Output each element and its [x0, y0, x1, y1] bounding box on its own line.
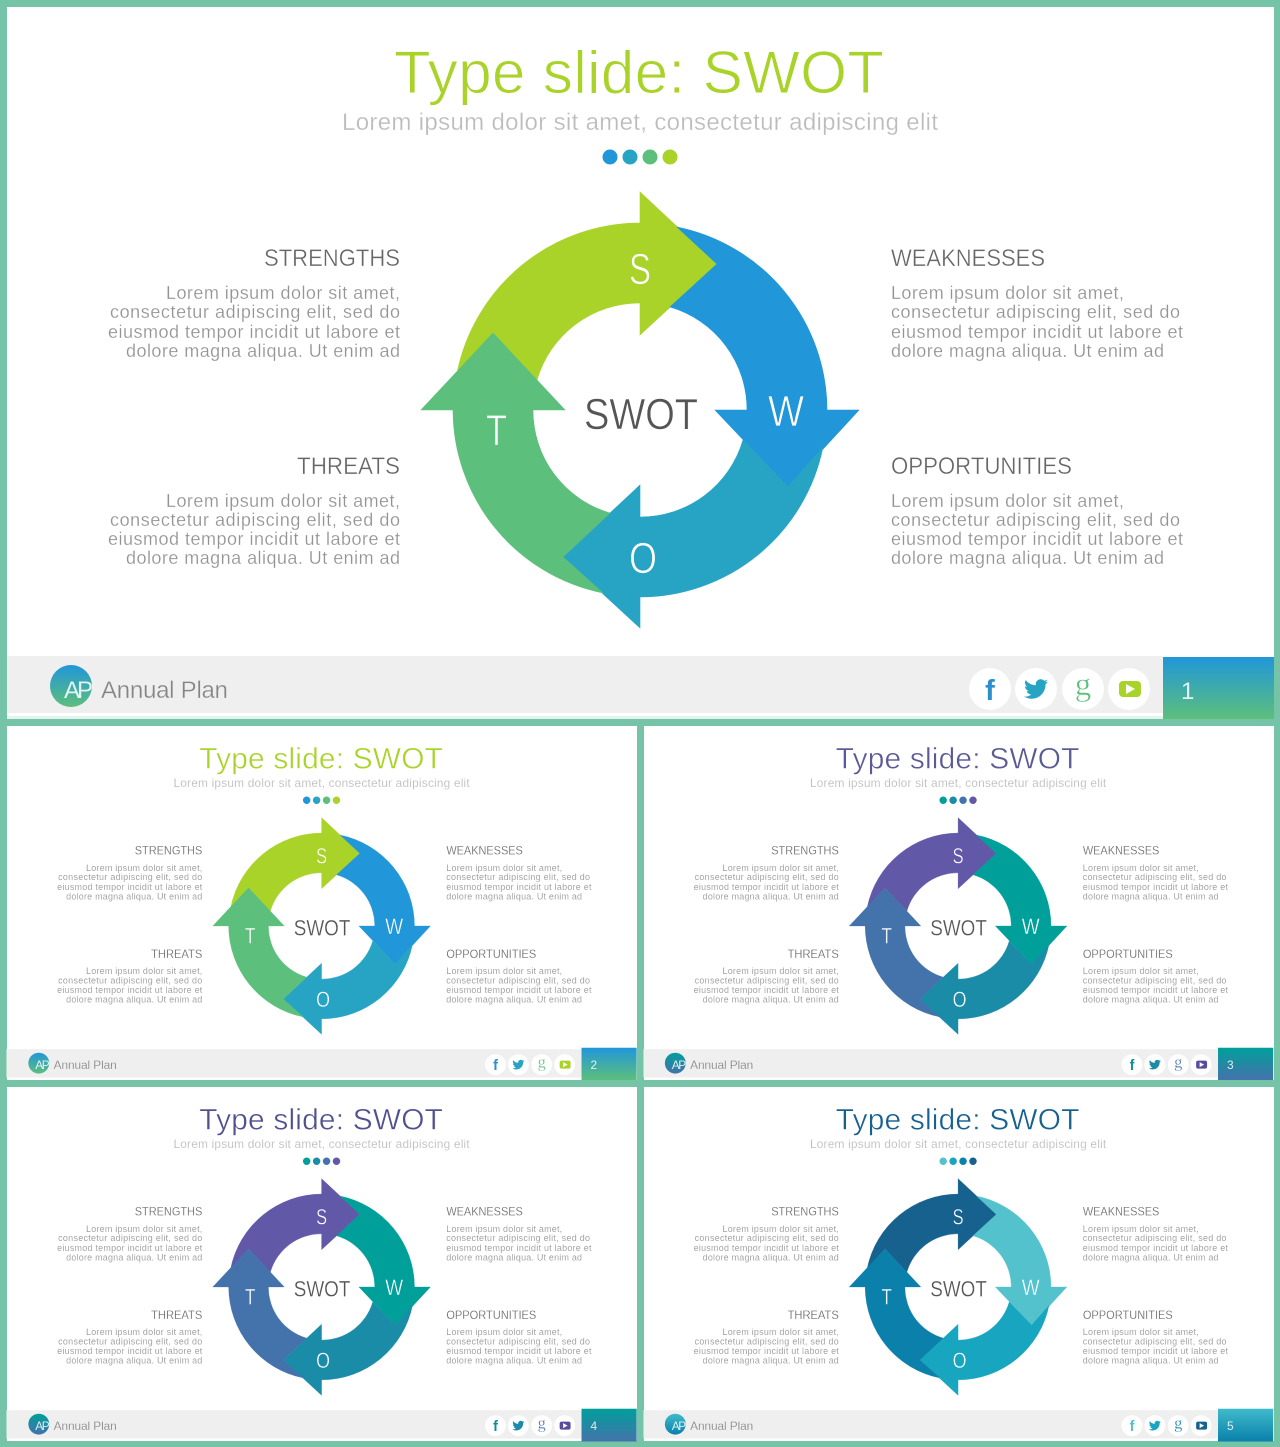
- subtitle: Lorem ipsum dolor sit amet, consectetur adipiscing elit: [342, 109, 938, 136]
- text block: threats: eiusmod tempor incidit ut labore et: [57, 1346, 203, 1356]
- text block: strengths: consectetur adipiscing elit, sed do: [58, 872, 202, 882]
- text block: opportunities: eiusmod tempor incidit ut labore et: [446, 985, 592, 995]
- slide 3: purple and teal thumbnail: [643, 726, 1274, 1080]
- footer bar: [643, 1409, 1273, 1442]
- arrow: O: [920, 1302, 1049, 1395]
- text block: weaknesses: [891, 245, 1183, 361]
- brand name: Annual Plan: [690, 1419, 753, 1433]
- centre label: SWOT: [584, 390, 698, 439]
- text block: threats: consectetur adipiscing elit, sed do: [695, 1337, 839, 1347]
- text block: threats: [57, 947, 203, 1005]
- arrow: O: O: [316, 1348, 330, 1373]
- arrow: T: T: [486, 406, 507, 455]
- footer bar: [6, 1048, 637, 1080]
- text block: weaknesses: eiusmod tempor incidit ut labore et: [1083, 882, 1228, 892]
- text block: threats: THREATS: [788, 947, 839, 961]
- icon: twitter: [508, 1054, 529, 1075]
- colour dots: [602, 150, 678, 164]
- text block: opportunities: consectetur adipiscing elit, sed do: [446, 1337, 590, 1347]
- footer bar: [6, 1409, 637, 1442]
- icon: facebook: f: [1130, 1058, 1135, 1074]
- text block: opportunities: Lorem ipsum dolor sit amet,: [446, 966, 562, 976]
- icon: facebook: [485, 1054, 506, 1075]
- icon: youtube: [1191, 1054, 1212, 1075]
- text block: weaknesses: eiusmod tempor incidit ut labore et: [1083, 1243, 1228, 1253]
- arrow: T: T: [882, 923, 892, 948]
- text block: weaknesses: [1083, 1204, 1228, 1263]
- text block: strengths: Lorem ipsum dolor sit amet,: [166, 283, 400, 303]
- SWOT cycle diagram: [213, 818, 430, 1034]
- arrow: S: [457, 192, 717, 380]
- text block: threats: eiusmod tempor incidit ut labore et: [108, 529, 400, 549]
- logo: AP: [64, 677, 93, 704]
- arrow: W: W: [768, 387, 804, 436]
- text block: threats: consectetur adipiscing elit, sed do: [110, 510, 400, 530]
- arrow: S: S: [629, 245, 651, 294]
- text block: weaknesses: [446, 843, 592, 902]
- arrow: W: W: [385, 914, 403, 939]
- text block: opportunities: OPPORTUNITIES: [1083, 1308, 1173, 1322]
- text block: weaknesses: dolore magna aliqua. Ut enim ad: [1083, 892, 1219, 902]
- text block: weaknesses: consectetur adipiscing elit, sed do: [446, 872, 590, 882]
- arrow: W: [973, 1196, 1067, 1325]
- SWOT cycle diagram: [849, 1179, 1067, 1395]
- arrow: T: [849, 888, 943, 1017]
- text block: strengths: consectetur adipiscing elit, sed do: [695, 1233, 839, 1243]
- text block: weaknesses: Lorem ipsum dolor sit amet,: [1083, 863, 1199, 873]
- arrow: O: [563, 440, 823, 628]
- page number box: [582, 1048, 637, 1080]
- text block: threats: dolore magna aliqua. Ut enim ad: [126, 548, 400, 568]
- subtitle: Lorem ipsum dolor sit amet, consectetur adipiscing elit: [173, 1137, 470, 1151]
- text block: weaknesses: WEAKNESSES: [446, 843, 523, 857]
- icon: google: [531, 1053, 552, 1075]
- text block: opportunities: dolore magna aliqua. Ut enim ad: [1083, 1356, 1219, 1366]
- text block: strengths: consectetur adipiscing elit, sed do: [58, 1233, 202, 1243]
- page number box: 4: [590, 1419, 597, 1433]
- text block: opportunities: [446, 1308, 592, 1366]
- text block: opportunities: eiusmod tempor incidit ut labore et: [1083, 985, 1228, 995]
- arrow: W: W: [1022, 914, 1040, 939]
- text block: strengths: eiusmod tempor incidit ut labore et: [694, 882, 839, 892]
- logo: [28, 1053, 50, 1074]
- subtitle: Lorem ipsum dolor sit amet, consectetur adipiscing elit: [173, 776, 470, 790]
- logo: [665, 1414, 686, 1435]
- text block: weaknesses: eiusmod tempor incidit ut labore et: [891, 322, 1183, 342]
- text block: weaknesses: Lorem ipsum dolor sit amet,: [1083, 1224, 1199, 1234]
- icon: youtube: [1191, 1415, 1212, 1436]
- text block: weaknesses: consectetur adipiscing elit, sed do: [1083, 1233, 1226, 1243]
- text block: threats: Lorem ipsum dolor sit amet,: [86, 1327, 202, 1337]
- slide 4: purple and teal thumbnail: [6, 1087, 637, 1442]
- text block: strengths: Lorem ipsum dolor sit amet,: [723, 1224, 839, 1234]
- slide 2: green and blue thumbnail: [6, 726, 637, 1080]
- arrow: S: [231, 818, 360, 911]
- slide 5: deep blue and aqua thumbnail: [643, 1087, 1274, 1442]
- arrow: O: O: [316, 987, 330, 1012]
- text block: strengths: Lorem ipsum dolor sit amet,: [86, 1224, 202, 1234]
- icon: google: g: [538, 1053, 546, 1072]
- icon: facebook: f: [1130, 1419, 1135, 1435]
- text block: opportunities: OPPORTUNITIES: [446, 1308, 536, 1322]
- text block: opportunities: OPPORTUNITIES: [891, 453, 1072, 480]
- page number box: [582, 1409, 637, 1442]
- icon: google: g: [538, 1414, 546, 1433]
- text block: opportunities: [1083, 947, 1228, 1005]
- icon: google: g: [1174, 1414, 1182, 1433]
- text block: weaknesses: Lorem ipsum dolor sit amet,: [446, 863, 562, 873]
- logo: [665, 1053, 686, 1074]
- text block: weaknesses: consectetur adipiscing elit, sed do: [891, 302, 1180, 322]
- text block: opportunities: [1083, 1308, 1228, 1366]
- text block: strengths: dolore magna aliqua. Ut enim ad: [703, 1253, 839, 1263]
- text block: weaknesses: WEAKNESSES: [1083, 1204, 1159, 1218]
- text block: threats: Lorem ipsum dolor sit amet,: [86, 966, 202, 976]
- text block: opportunities: dolore magna aliqua. Ut enim ad: [446, 995, 582, 1005]
- text block: weaknesses: Lorem ipsum dolor sit amet,: [446, 1224, 562, 1234]
- text block: strengths: dolore magna aliqua. Ut enim ad: [66, 892, 202, 902]
- icon: facebook: [1122, 1415, 1142, 1436]
- centre label: SWOT: [930, 1276, 987, 1301]
- title: Type slide: SWOT: [836, 1103, 1079, 1136]
- arrow: T: [421, 333, 610, 593]
- logo: [50, 665, 93, 707]
- text block: opportunities: dolore magna aliqua. Ut enim ad: [891, 548, 1164, 568]
- icon: twitter: [1144, 1054, 1165, 1075]
- subtitle: Lorem ipsum dolor sit amet, consectetur adipiscing elit: [810, 776, 1107, 790]
- icon: google: [1168, 1053, 1189, 1075]
- text block: threats: Lorem ipsum dolor sit amet,: [723, 1327, 839, 1337]
- arrow: S: S: [316, 843, 327, 868]
- text block: weaknesses: dolore magna aliqua. Ut enim ad: [891, 341, 1164, 361]
- arrow: T: [213, 888, 307, 1017]
- icon: google: [1168, 1414, 1189, 1436]
- page number box: 1: [1181, 678, 1194, 705]
- icon: youtube: [1108, 668, 1150, 710]
- text block: opportunities: eiusmod tempor incidit ut labore et: [891, 529, 1183, 549]
- text block: threats: Lorem ipsum dolor sit amet,: [166, 491, 400, 511]
- text block: weaknesses: eiusmod tempor incidit ut labore et: [446, 882, 592, 892]
- SWOT cycle diagram: [421, 192, 859, 628]
- text block: threats: THREATS: [297, 453, 400, 480]
- text block: strengths: eiusmod tempor incidit ut labore et: [108, 322, 400, 342]
- text block: threats: dolore magna aliqua. Ut enim ad: [66, 1356, 202, 1366]
- brand name: Annual Plan: [54, 1058, 117, 1072]
- colour dots: [939, 797, 977, 804]
- text block: weaknesses: consectetur adipiscing elit, sed do: [1083, 872, 1226, 882]
- text block: threats: [57, 1308, 203, 1366]
- page number box: 2: [590, 1058, 597, 1072]
- text block: opportunities: consectetur adipiscing elit, sed do: [1083, 1337, 1226, 1347]
- text block: weaknesses: WEAKNESSES: [1083, 843, 1159, 857]
- arrow: S: [231, 1179, 360, 1272]
- text block: strengths: [57, 1204, 203, 1263]
- SWOT cycle diagram: [213, 1179, 430, 1395]
- icon: youtube: [554, 1415, 575, 1436]
- text block: strengths: consectetur adipiscing elit, sed do: [110, 302, 400, 322]
- logo: AP: [35, 1058, 50, 1072]
- logo: AP: [35, 1419, 50, 1433]
- brand name: Annual Plan: [690, 1058, 753, 1072]
- text block: opportunities: Lorem ipsum dolor sit amet,: [1083, 966, 1199, 976]
- arrow: W: W: [385, 1275, 403, 1300]
- text block: threats: Lorem ipsum dolor sit amet,: [723, 966, 839, 976]
- text block: weaknesses: dolore magna aliqua. Ut enim ad: [446, 1253, 582, 1263]
- footer bar: [7, 656, 1274, 719]
- text block: opportunities: OPPORTUNITIES: [1083, 947, 1173, 961]
- logo: AP: [672, 1058, 686, 1072]
- icon: twitter: [508, 1415, 529, 1436]
- page number box: [1218, 1048, 1273, 1080]
- text block: threats: consectetur adipiscing elit, sed do: [58, 1337, 202, 1347]
- arrow: T: T: [245, 923, 255, 948]
- text block: threats: [694, 1308, 839, 1366]
- arrow: S: S: [953, 843, 964, 868]
- text block: strengths: eiusmod tempor incidit ut labore et: [57, 1243, 203, 1253]
- arrow: T: [849, 1249, 943, 1378]
- arrow: W: [336, 835, 430, 964]
- icon: google: [531, 1414, 552, 1436]
- text block: strengths: eiusmod tempor incidit ut labore et: [57, 882, 203, 892]
- text block: threats: eiusmod tempor incidit ut labore et: [694, 985, 839, 995]
- text block: weaknesses: dolore magna aliqua. Ut enim ad: [1083, 1253, 1219, 1263]
- brand name: Annual Plan: [54, 1419, 117, 1433]
- icon: facebook: [485, 1415, 506, 1436]
- centre label: SWOT: [294, 1276, 350, 1301]
- page number box: 5: [1227, 1419, 1234, 1433]
- text block: threats: eiusmod tempor incidit ut labore et: [694, 1346, 839, 1356]
- logo: [28, 1414, 50, 1435]
- text block: opportunities: dolore magna aliqua. Ut enim ad: [446, 1356, 582, 1366]
- icon: facebook: f: [493, 1419, 498, 1435]
- text block: weaknesses: [1083, 843, 1228, 902]
- subtitle: Lorem ipsum dolor sit amet, consectetur adipiscing elit: [810, 1137, 1107, 1151]
- text block: weaknesses: dolore magna aliqua. Ut enim ad: [446, 892, 582, 902]
- text block: opportunities: Lorem ipsum dolor sit amet,: [446, 1327, 562, 1337]
- icon: twitter: [1015, 668, 1057, 710]
- arrow: O: O: [629, 534, 657, 583]
- colour dots: [939, 1158, 977, 1165]
- text block: weaknesses: [446, 1204, 592, 1263]
- icon: google: g: [1075, 667, 1091, 703]
- colour dots: [303, 797, 340, 804]
- text block: strengths: STRENGTHS: [135, 843, 202, 857]
- text block: strengths: dolore magna aliqua. Ut enim ad: [703, 892, 839, 902]
- text block: strengths: STRENGTHS: [771, 1204, 839, 1218]
- text block: opportunities: eiusmod tempor incidit ut labore et: [446, 1346, 592, 1356]
- text block: opportunities: OPPORTUNITIES: [446, 947, 536, 961]
- page number box: 3: [1227, 1058, 1234, 1072]
- text block: weaknesses: WEAKNESSES: [891, 245, 1045, 272]
- text block: strengths: [694, 1204, 839, 1263]
- text block: weaknesses: consectetur adipiscing elit, sed do: [446, 1233, 590, 1243]
- title: Type slide: SWOT: [199, 1103, 443, 1136]
- text block: threats: consectetur adipiscing elit, sed do: [58, 976, 202, 986]
- text block: strengths: Lorem ipsum dolor sit amet,: [86, 863, 202, 873]
- text block: threats: eiusmod tempor incidit ut labore et: [57, 985, 203, 995]
- text block: weaknesses: eiusmod tempor incidit ut labore et: [446, 1243, 592, 1253]
- text block: strengths: STRENGTHS: [771, 843, 839, 857]
- logo: AP: [672, 1419, 686, 1433]
- text block: strengths: [108, 245, 400, 361]
- page number box: [1218, 1409, 1273, 1442]
- text block: threats: [108, 453, 400, 568]
- icon: facebook: f: [985, 675, 995, 707]
- text block: threats: dolore magna aliqua. Ut enim ad: [703, 1356, 839, 1366]
- text block: opportunities: Lorem ipsum dolor sit amet,: [1083, 1327, 1199, 1337]
- icon: facebook: f: [493, 1058, 498, 1074]
- arrow: O: [283, 941, 413, 1034]
- arrow: W: [670, 227, 859, 487]
- arrow: W: W: [1022, 1275, 1040, 1300]
- arrow: W: [336, 1196, 430, 1325]
- arrow: T: [213, 1249, 307, 1378]
- text block: opportunities: consectetur adipiscing elit, sed do: [1083, 976, 1226, 986]
- text block: opportunities: eiusmod tempor incidit ut labore et: [1083, 1346, 1228, 1356]
- text block: strengths: Lorem ipsum dolor sit amet,: [723, 863, 839, 873]
- text block: threats: dolore magna aliqua. Ut enim ad: [66, 995, 202, 1005]
- text block: strengths: dolore magna aliqua. Ut enim ad: [66, 1253, 202, 1263]
- text block: opportunities: dolore magna aliqua. Ut enim ad: [1083, 995, 1219, 1005]
- slide 1: large green and blue SWOT: [7, 7, 1274, 719]
- text block: strengths: consectetur adipiscing elit, sed do: [695, 872, 839, 882]
- arrow: T: T: [245, 1284, 255, 1309]
- text block: opportunities: [446, 947, 592, 1005]
- arrow: O: [283, 1302, 413, 1395]
- text block: opportunities: Lorem ipsum dolor sit amet,: [891, 491, 1124, 511]
- text block: threats: consectetur adipiscing elit, sed do: [695, 976, 839, 986]
- icon: facebook: [969, 668, 1011, 710]
- centre label: SWOT: [294, 915, 350, 940]
- text block: opportunities: consectetur adipiscing elit, sed do: [891, 510, 1180, 530]
- text block: opportunities: consectetur adipiscing elit, sed do: [446, 976, 590, 986]
- arrow: S: S: [316, 1204, 327, 1229]
- brand name: Annual Plan: [101, 677, 228, 704]
- text block: weaknesses: WEAKNESSES: [446, 1204, 523, 1218]
- arrow: O: [920, 941, 1049, 1034]
- text block: threats: THREATS: [788, 1308, 839, 1322]
- arrow: O: O: [953, 987, 967, 1012]
- text block: strengths: eiusmod tempor incidit ut labore et: [694, 1243, 839, 1253]
- text block: strengths: dolore magna aliqua. Ut enim ad: [126, 341, 400, 361]
- icon: youtube: [554, 1054, 575, 1075]
- text block: threats: THREATS: [151, 947, 202, 961]
- icon: google: g: [1174, 1053, 1182, 1072]
- title: Type slide: SWOT: [199, 742, 443, 775]
- title: Type slide: SWOT: [394, 39, 884, 106]
- icon: google: [1062, 667, 1104, 710]
- colour dots: [303, 1158, 340, 1165]
- text block: threats: dolore magna aliqua. Ut enim ad: [703, 995, 839, 1005]
- SWOT cycle diagram: [849, 818, 1067, 1034]
- text block: strengths: STRENGTHS: [264, 245, 400, 272]
- text block: weaknesses: Lorem ipsum dolor sit amet,: [891, 283, 1124, 303]
- icon: facebook: [1122, 1054, 1142, 1075]
- arrow: S: S: [953, 1204, 964, 1229]
- text block: threats: THREATS: [151, 1308, 202, 1322]
- text block: strengths: [694, 843, 839, 902]
- arrow: S: [867, 1179, 996, 1272]
- arrow: W: [973, 835, 1067, 964]
- arrow: T: T: [882, 1284, 892, 1309]
- text block: threats: [694, 947, 839, 1005]
- text block: opportunities: [891, 453, 1183, 568]
- icon: twitter: [1144, 1415, 1165, 1436]
- footer bar: [643, 1048, 1273, 1080]
- arrow: S: [867, 818, 996, 911]
- page number box: [1163, 657, 1274, 719]
- text block: strengths: [57, 843, 203, 902]
- arrow: O: O: [953, 1348, 967, 1373]
- title: Type slide: SWOT: [836, 742, 1079, 775]
- centre label: SWOT: [930, 915, 987, 940]
- text block: strengths: STRENGTHS: [135, 1204, 202, 1218]
